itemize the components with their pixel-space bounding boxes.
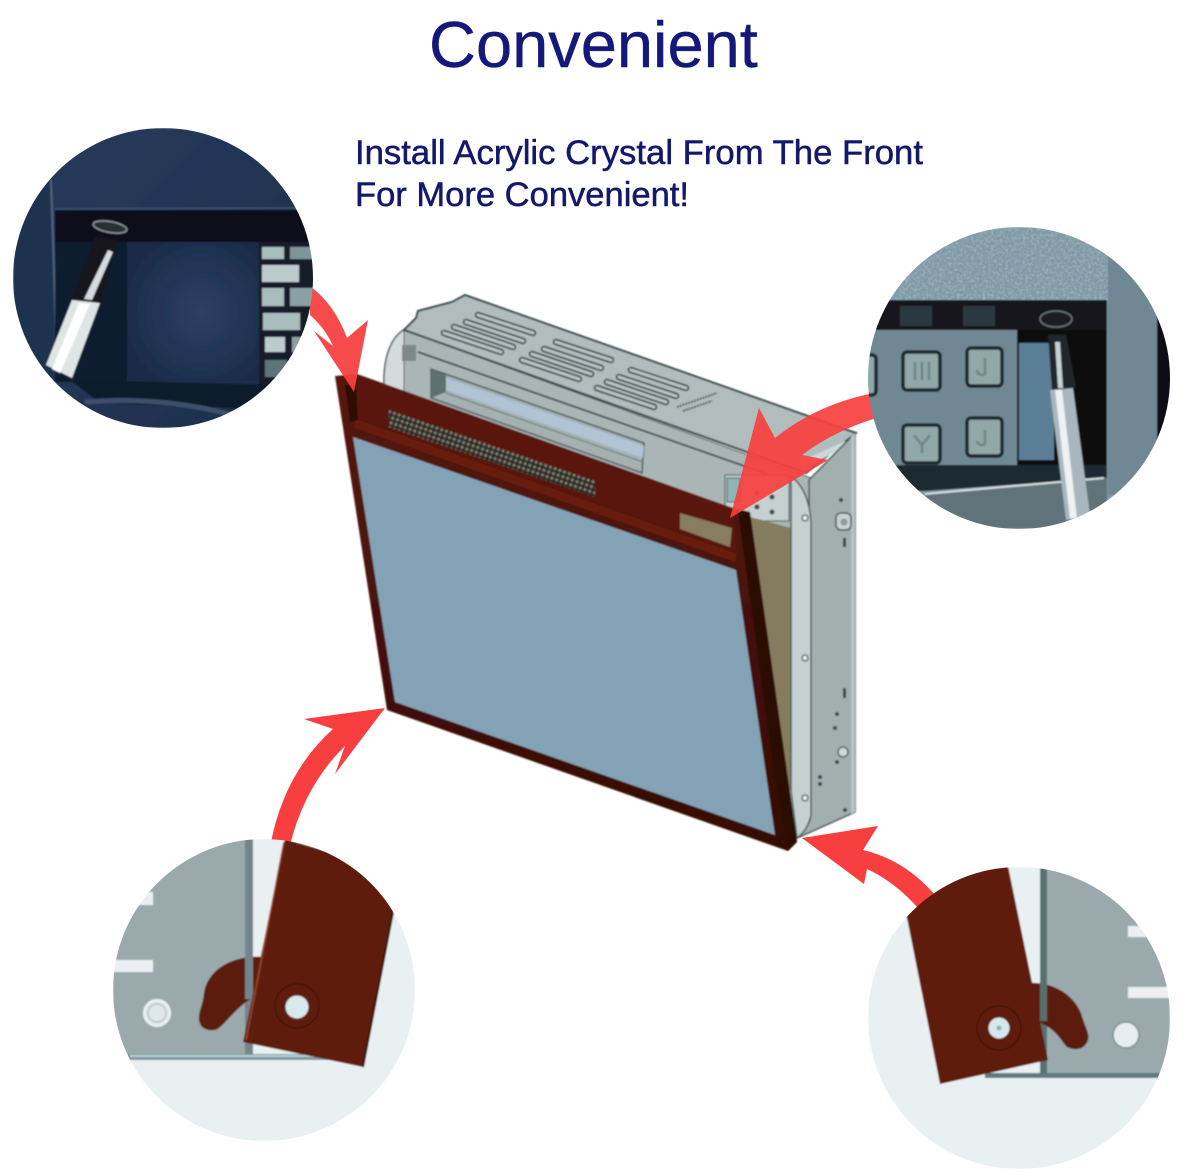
- round hole: [1113, 1022, 1139, 1048]
- round hole: [144, 1000, 170, 1026]
- tile hole: [286, 996, 308, 1018]
- side knob upper: [836, 513, 851, 530]
- screwdriver tip: [72, 237, 117, 303]
- brown tile: [243, 839, 425, 1067]
- frame upper band: [355, 376, 737, 553]
- lip line of top plate: [418, 352, 790, 482]
- pale background: [113, 839, 415, 1141]
- button glyphs: [914, 358, 985, 453]
- sill reflection: [84, 397, 230, 416]
- tile ring: [275, 984, 319, 1028]
- dark right strip: [738, 510, 797, 851]
- tile ring: [977, 1006, 1021, 1050]
- right grey panel: [1108, 255, 1158, 495]
- dark ledge: [55, 210, 315, 242]
- keypad buttons: [858, 348, 1002, 463]
- tile dark right edge: [363, 912, 393, 1067]
- frame ridge: [353, 418, 737, 563]
- screw head: [92, 219, 128, 235]
- hole ring: [148, 1004, 166, 1022]
- brick surround: [259, 242, 319, 387]
- red arrow bottom left: [271, 708, 385, 845]
- top plate caption marks: [677, 393, 717, 411]
- flange screws: [802, 515, 808, 801]
- ledge highlight: [55, 208, 300, 209]
- strip over hook: [245, 957, 253, 999]
- left wall: [14, 181, 52, 312]
- blue light strip: [446, 378, 644, 458]
- title: Convenient: [429, 8, 758, 81]
- blue bracket: [1019, 343, 1054, 460]
- rail light: [130, 1055, 330, 1057]
- bottom rail: [113, 1054, 333, 1060]
- lower slot: [1128, 987, 1173, 998]
- tile hole: [988, 1018, 1010, 1038]
- vertical dark strip: [1040, 867, 1047, 1073]
- wall seam: [51, 180, 56, 330]
- lower plate: [925, 478, 1107, 529]
- screwdriver shaft: [1050, 388, 1090, 520]
- brown hook: [199, 957, 262, 1030]
- window bricks: [262, 247, 313, 377]
- vertical dark strip: [245, 839, 253, 1055]
- red arrow top right: [730, 392, 880, 518]
- lower dark sill: [73, 381, 268, 409]
- brown frame: [335, 374, 797, 851]
- dark channel: [868, 300, 1107, 330]
- plate highlight line: [925, 478, 1104, 494]
- lower slot: [110, 960, 153, 972]
- handle white stripe: [52, 303, 90, 373]
- control panel buttons: [754, 490, 774, 514]
- textured grey background: [889, 227, 1116, 501]
- blower opening: [431, 369, 644, 473]
- rear rounded left side: [384, 329, 410, 400]
- instruction text: [355, 134, 923, 214]
- front face of housing: [404, 330, 811, 535]
- control panel teal mark: [727, 478, 740, 502]
- vent slots group 2: [522, 342, 611, 379]
- hole centre: [996, 1026, 1002, 1030]
- screwdriver handle: [46, 300, 100, 378]
- olive inner panel: [750, 517, 791, 790]
- screwdriver tip: [1048, 335, 1076, 390]
- vent slots group 3: [597, 370, 686, 407]
- dark corner post: [345, 385, 358, 422]
- inner panel: [127, 242, 261, 382]
- brown tile: [880, 866, 1048, 1084]
- side panel edge: [851, 433, 855, 814]
- red arrow top left: [310, 286, 368, 392]
- screw head: [1040, 311, 1072, 327]
- brown hook: [1030, 983, 1088, 1049]
- dark vertical channel: [1017, 330, 1107, 478]
- louvre line: [446, 393, 643, 462]
- bracket on left: [402, 345, 416, 361]
- keypad panel: [868, 330, 1017, 465]
- fireplace insert illustration: [335, 295, 856, 851]
- vent slots group 1: [444, 315, 533, 352]
- side panel: [797, 433, 855, 838]
- side knob lower: [838, 747, 848, 757]
- opening shadow: [431, 369, 446, 398]
- inner dark recess: [55, 242, 127, 382]
- side panel holes: [818, 498, 847, 812]
- shaft highlight: [1055, 390, 1077, 519]
- glass pane: [353, 437, 775, 835]
- strip over hook: [1040, 983, 1047, 1021]
- tile edge highlight: [246, 842, 284, 1040]
- instruction text: For More Convenient!: [355, 176, 689, 214]
- tip highlight: [84, 250, 113, 300]
- upper slot: [1128, 926, 1158, 937]
- upper slot: [135, 892, 153, 905]
- mesh vent: [389, 410, 595, 497]
- olive label window: [680, 513, 732, 547]
- grey side plate: [113, 839, 245, 1055]
- detail circle: top left screwdriver: [13, 128, 319, 428]
- bottom rail: [985, 1073, 1170, 1078]
- detail circle: bottom right hinge: [868, 866, 1173, 1169]
- top plate: [404, 295, 856, 473]
- far right shadow: [1156, 316, 1170, 440]
- tip highlight: [1055, 342, 1063, 388]
- light lip on right end of plate: [806, 441, 846, 465]
- instruction text: Install Acrylic Crystal From The Front: [355, 134, 923, 172]
- red arrow bottom right: [802, 826, 935, 908]
- pale background: [868, 867, 1170, 1169]
- surface grain on top zone: [868, 227, 1108, 300]
- channel soft patches: [900, 306, 995, 326]
- lower dark band: [868, 465, 1107, 491]
- detail circle: bottom left hinge: [110, 839, 425, 1141]
- navy background: [48, 128, 297, 428]
- grey side plate: [1047, 867, 1170, 1073]
- light flange: [791, 476, 811, 838]
- control panel behind frame: [725, 475, 789, 521]
- detail circle: top right screwdriver: [858, 227, 1171, 529]
